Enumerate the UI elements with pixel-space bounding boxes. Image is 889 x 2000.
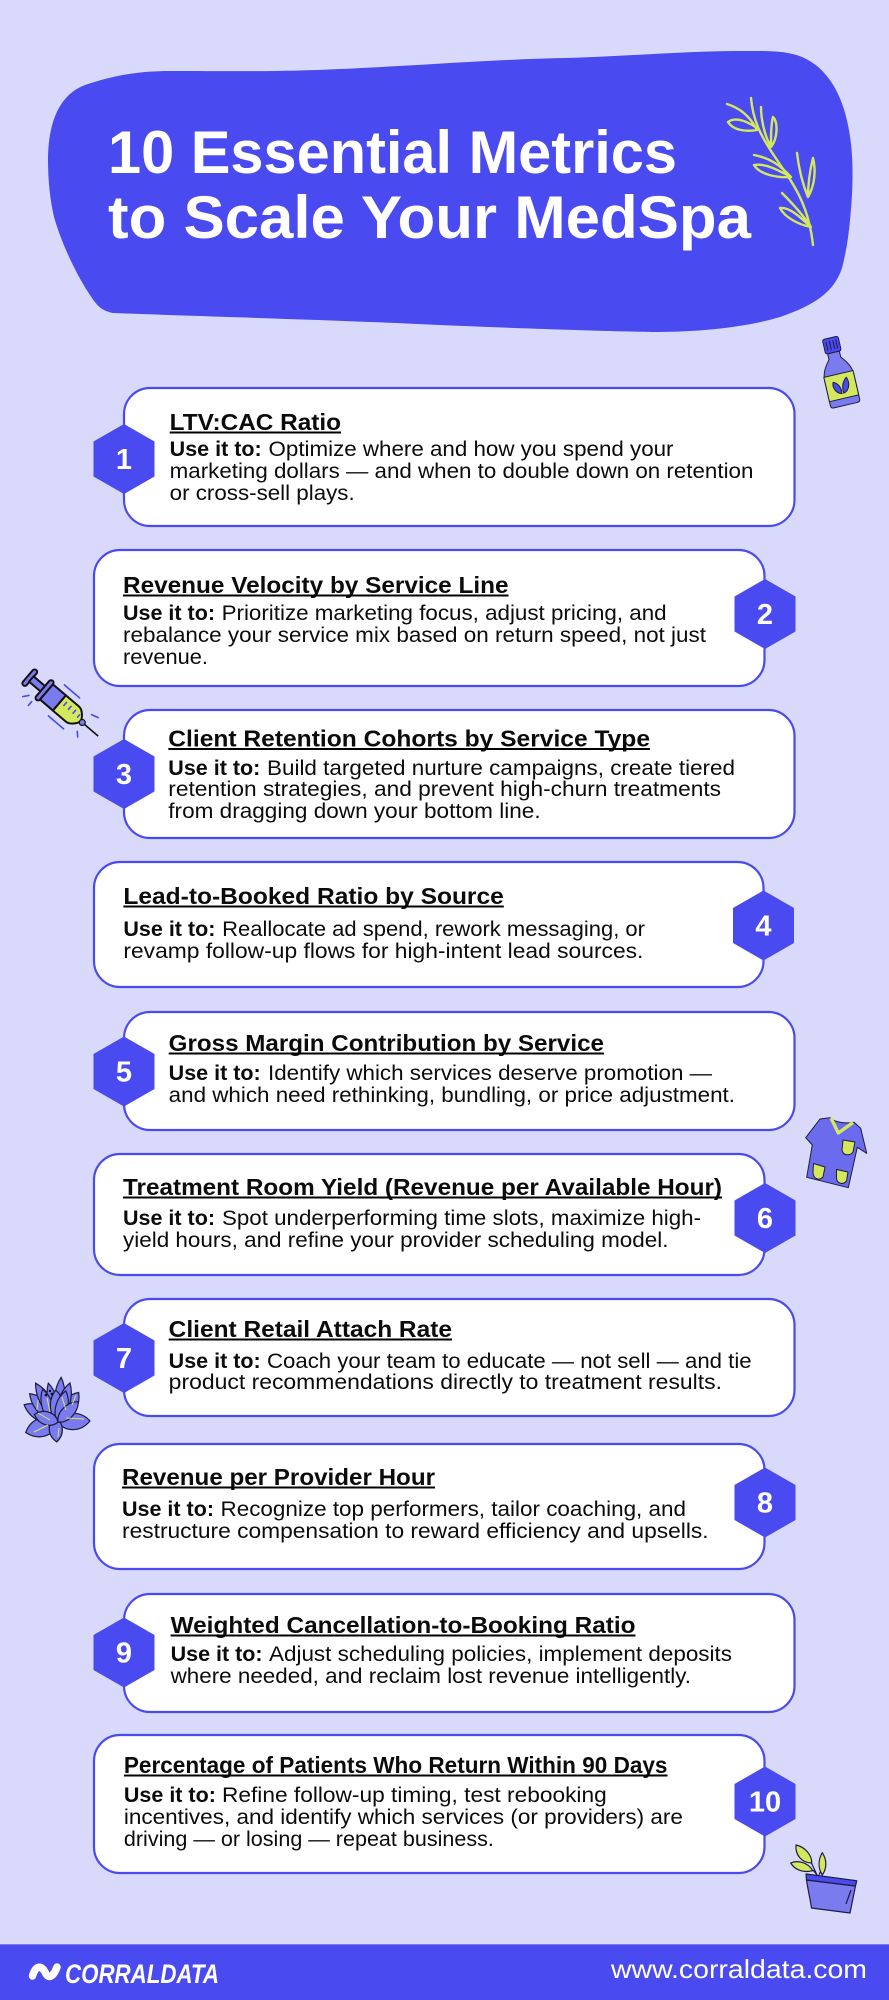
- panel: metric 5: [94, 1012, 794, 1130]
- icon: syringe: [14, 663, 109, 753]
- badge 1: [94, 424, 154, 494]
- badge 4: [733, 890, 794, 960]
- icon: bottle: [816, 335, 860, 409]
- text block: [169, 1350, 752, 1394]
- badge 8: 8: [757, 1488, 773, 1520]
- icon: potted plant: [791, 1845, 857, 1913]
- panel: metric 10: [94, 1735, 796, 1873]
- text block: Use it to:: [171, 1643, 263, 1666]
- footer bar: [0, 1944, 889, 2000]
- badge 9: 9: [116, 1638, 132, 1670]
- text block: Refine follow-up timing, test rebooking: [222, 1784, 607, 1807]
- badge 5: [94, 1036, 154, 1106]
- text block: Recognize top performers, tailor coaching, and: [220, 1498, 686, 1521]
- text block: [170, 1643, 732, 1688]
- text block: Use it to:: [169, 1062, 261, 1085]
- text block: marketing dollars — and when to double down on retention: [170, 460, 753, 483]
- badge 6: [734, 1183, 796, 1253]
- text block: where needed, and reclaim lost revenue intelligently.: [170, 1665, 691, 1688]
- heading: Weighted Cancellation-to-Booking Ratio: [171, 1612, 636, 1638]
- text block: Use it to:: [123, 602, 215, 625]
- heading: Revenue Velocity by Service Line: [123, 572, 508, 598]
- badge 1: 1: [116, 444, 132, 476]
- title: to Scale Your MedSpa: [108, 184, 752, 251]
- badge 6: 6: [757, 1203, 773, 1235]
- panel: metric 4: [94, 862, 794, 987]
- badge 7: [94, 1323, 154, 1393]
- badge 8: [734, 1468, 796, 1538]
- text block: rebalance your service mix based on return speed, not just: [123, 624, 706, 647]
- text block: [169, 1062, 735, 1107]
- panel: metric 3: [94, 710, 794, 838]
- panel: metric 1: [94, 388, 794, 526]
- text block: [123, 602, 706, 669]
- text block: yield hours, and refine your provider scheduling model.: [123, 1229, 668, 1252]
- text block: Use it to:: [122, 1498, 214, 1521]
- text block: [123, 918, 645, 963]
- icon: leaf branch: [727, 98, 815, 245]
- badge 3: 3: [116, 759, 132, 791]
- text block: or cross-sell plays.: [170, 482, 355, 505]
- badge 2: [734, 579, 796, 649]
- text block: [168, 757, 735, 823]
- badge 9: [94, 1618, 154, 1688]
- badge 7: 7: [116, 1343, 132, 1375]
- header blob: [48, 51, 853, 332]
- text block: Identify which services deserve promotion —: [268, 1062, 712, 1085]
- text block: Build targeted nurture campaigns, create tiered: [267, 757, 735, 780]
- heading: Client Retail Attach Rate: [169, 1316, 452, 1342]
- title: 10 Essential Metrics: [108, 119, 677, 186]
- text block: Use it to:: [169, 1350, 261, 1373]
- heading: Gross Margin Contribution by Service: [169, 1030, 604, 1056]
- icon: logo wave: [32, 1967, 57, 1976]
- text block: and which need rethinking, bundling, or price adjustment.: [169, 1084, 735, 1107]
- badge 4: 4: [755, 910, 772, 942]
- text block: revenue.: [123, 646, 208, 669]
- text block: Use it to:: [168, 757, 260, 780]
- text block: Spot underperforming time slots, maximize high-: [222, 1207, 701, 1230]
- text block: [170, 438, 753, 505]
- text block: revamp follow-up flows for high-intent lead sources.: [123, 940, 643, 963]
- badge 5: 5: [116, 1056, 132, 1088]
- panel: metric 7: [94, 1299, 794, 1416]
- badge 3: [94, 739, 154, 809]
- text block: incentives, and identify which services (or providers) are: [124, 1806, 683, 1829]
- text block: driving — or losing — repeat business.: [124, 1828, 494, 1851]
- heading: Lead-to-Booked Ratio by Source: [123, 883, 504, 909]
- heading: Treatment Room Yield (Revenue per Available Hour): [123, 1174, 722, 1200]
- panel: metric 2: [94, 550, 796, 686]
- text block: Prioritize marketing focus, adjust pricing, and: [222, 602, 667, 625]
- badge 10: [734, 1766, 796, 1836]
- heading: Client Retention Cohorts by Service Type: [168, 726, 650, 752]
- text block: retention strategies, and prevent high-churn treatments: [168, 778, 721, 801]
- panel: metric 8: [94, 1444, 796, 1569]
- panel: metric 6: [94, 1154, 796, 1275]
- text block: [123, 1207, 701, 1252]
- text block: product recommendations directly to treatment results.: [169, 1371, 722, 1394]
- text block: from dragging down your bottom line.: [168, 800, 541, 823]
- text block: Use it to:: [123, 1207, 215, 1230]
- text block: Use it to:: [123, 918, 215, 941]
- badge 10: 10: [749, 1786, 781, 1818]
- text block: Adjust scheduling policies, implement deposits: [269, 1643, 732, 1666]
- text block: [124, 1784, 683, 1851]
- logo: CORRALDATA: [65, 1959, 219, 1989]
- text block: restructure compensation to reward efficiency and upsells.: [122, 1520, 709, 1543]
- heading: Revenue per Provider Hour: [122, 1464, 435, 1490]
- heading: Percentage of Patients Who Return Within 90 Days: [124, 1752, 667, 1778]
- icon: lotus flower: [21, 1377, 90, 1442]
- website url: www.corraldata.com: [610, 1954, 867, 1984]
- heading: LTV:CAC Ratio: [170, 409, 341, 435]
- text block: Reallocate ad spend, rework messaging, or: [222, 918, 645, 941]
- text block: Coach your team to educate — not sell — and tie: [267, 1350, 752, 1373]
- icon: scrubs shirt: [806, 1118, 867, 1188]
- text block: Use it to:: [124, 1784, 216, 1807]
- text block: Optimize where and how you spend your: [268, 438, 674, 461]
- title: [108, 119, 752, 251]
- text block: [122, 1498, 709, 1543]
- badge 2: 2: [757, 599, 773, 631]
- text block: Use it to:: [170, 438, 262, 461]
- panel: metric 9: [94, 1594, 794, 1712]
